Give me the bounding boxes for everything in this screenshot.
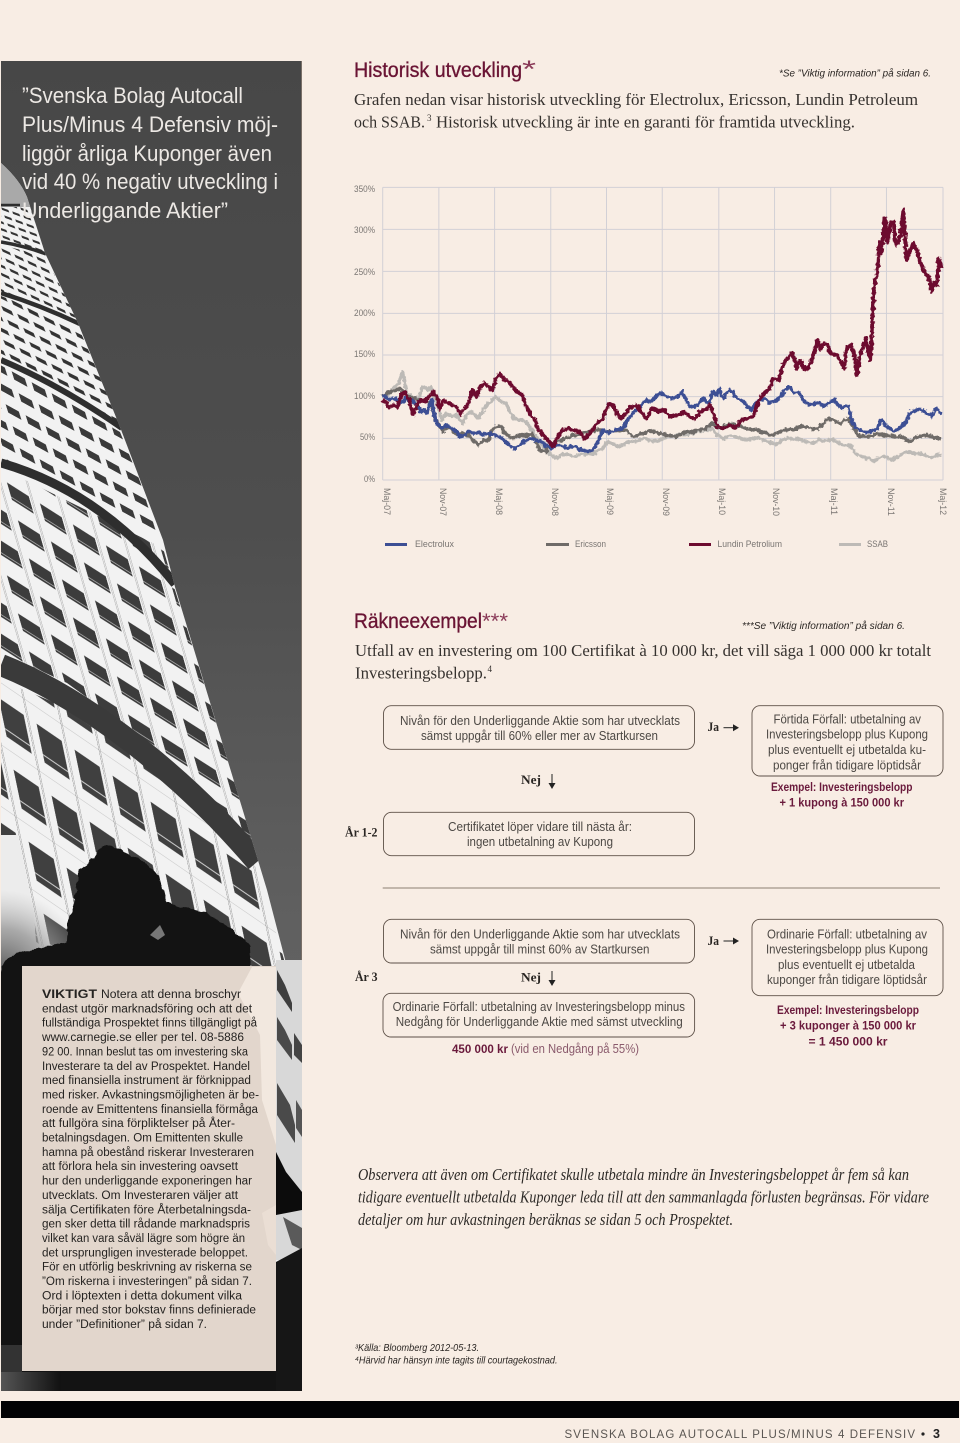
intro text: Räkneexempel: 4: [488, 664, 492, 674]
intro text: Historisk utveckling: 3: [427, 113, 432, 123]
box: ordinary maturity: plus eventuellt ej utbetalda: [778, 958, 915, 972]
notice text: Notera att denna broschyr: [101, 989, 241, 1001]
flow: year 3: [355, 919, 943, 1056]
quote in panel: [22, 83, 278, 223]
quote in panel: Plus/Minus 4 Defensiv möj-: [22, 112, 278, 137]
quote in panel: Underliggande Aktier”: [22, 198, 228, 223]
panel: VIKTIGT notice: [22, 966, 276, 1371]
x axis labels: Maj-08: [493, 488, 504, 515]
box: early maturity: ponger från tidigare löptidsår: [773, 758, 921, 772]
example: three coupons: Exempel: Investeringsbelopp: [777, 1003, 919, 1017]
italic remark: detaljer om hur avkastningen beräknas se sidan 5 och Prospektet.: [358, 1210, 733, 1229]
series: SSAB: [383, 372, 942, 462]
box: ordinary maturity minus decline: Nedgång för Underliggande Aktie med sämst utveckling: [396, 1015, 683, 1029]
photo: silhouette of person: [1, 845, 250, 1000]
box: ordinary maturity minus decline: Ordinarie Förfall: utbetalning av Investeringsbelopp minus: [393, 1000, 685, 1014]
notice text: www.carnegie.se eller per tel. 08-5886: [41, 1032, 244, 1044]
x axis labels: Nov-08: [549, 488, 560, 516]
intro text: Räkneexempel: [355, 641, 931, 682]
box: early maturity: plus eventuellt ej utbetalda ku-: [768, 743, 926, 757]
arrow: Nej: Nej: [521, 773, 541, 787]
notice text: börjar med stor bokstav finns definierade: [42, 1305, 256, 1317]
quote in panel: vid 40 % negativ utveckling i: [22, 169, 278, 194]
notice text: betalningsdagen. Om Emittenten skulle: [42, 1132, 243, 1144]
label: År 1-2: År 1-2: [345, 826, 378, 840]
intro text: Historisk utveckling: Grafen nedan visar historisk utveckling för Electrolux, Ericsson, Lundin Petroleum: [354, 90, 918, 109]
intro text: Historisk utveckling: och SSAB.: [354, 112, 425, 132]
example: loss amount: (vid en Nedgång på 55%): [511, 1042, 639, 1056]
chart legend: Lundin Petrolium: [718, 539, 782, 550]
box: ordinary maturity: Investeringsbelopp plus Kupong: [766, 942, 928, 956]
box: ordinary maturity: [752, 919, 943, 996]
panel: building photo: [0, 61, 302, 1391]
y axis labels: 150%: [354, 349, 375, 360]
series: Lundin Petrolium: [383, 209, 942, 447]
notice text: att förlora hela sin investering oavsett: [42, 1161, 239, 1173]
arrow: Ja: [708, 934, 739, 948]
box: level condition year 3: sämst uppgår till minst 60% av Startkursen: [430, 942, 650, 956]
note: see page 6: ***Se ”Viktig information” på sidan 6.: [742, 620, 905, 632]
x axis labels: Nov-07: [437, 488, 448, 516]
notice text: med finansiella instrument är förknippad: [42, 1075, 251, 1087]
notice text: ”Om riskerna i investeringen” på sidan 7.: [42, 1276, 252, 1288]
chart legend: Ericsson: [575, 539, 606, 550]
notice text: det ursprungligen investerade beloppet.: [42, 1247, 248, 1259]
heading: Historisk utveckling: *: [522, 56, 536, 83]
heading: Historisk utveckling: Historisk utveckling: [354, 59, 522, 82]
box: level condition year 3: Nivån för den Underliggande Aktie som har utvecklats: [400, 927, 680, 941]
y axis labels: 50%: [360, 432, 375, 443]
notice text: under ”Definitioner” på sidan 7.: [42, 1319, 207, 1331]
heading: Räkneexempel: ***: [482, 610, 508, 633]
note: see page 6: *Se ”Viktig information” på sidan 6.: [779, 68, 931, 80]
example: one coupon: Exempel: Investeringsbelopp: [771, 780, 912, 794]
example: one coupon: [771, 780, 912, 810]
box: level condition: [384, 706, 694, 749]
label: År 3: År 3: [355, 970, 378, 984]
notice text: endast utgör marknadsföring och att det: [42, 1003, 253, 1015]
footer text: SVENSKA BOLAG AUTOCALL PLUS/MINUS 4 DEFENSIV: [564, 1429, 915, 1441]
arrow: Nej: [521, 773, 556, 789]
footnotes: ⁴Härvid har hänsyn inte tagits till courtagekostnad.: [355, 1356, 558, 1366]
notice text: fullständiga Prospektet finns tillgängligt på: [42, 1018, 258, 1030]
x axis labels: Maj-09: [604, 488, 615, 515]
x axis labels: Maj-07: [381, 488, 392, 515]
box: ordinary maturity minus decline: [383, 993, 695, 1037]
y axis labels: 200%: [354, 308, 375, 319]
notice text: med risker. Avkastningsmöjligheten är be-: [42, 1090, 259, 1102]
chart legend: Electrolux: [415, 539, 454, 550]
y axis labels: [354, 184, 375, 485]
arrow: Nej: [521, 971, 556, 986]
italic remark: [358, 1165, 929, 1229]
example: loss amount: 450 000 kr: [452, 1042, 508, 1056]
arrow: Ja: Ja: [708, 720, 720, 734]
notice text: att fullgöra sina förpliktelser på Åter-: [42, 1117, 235, 1130]
example: loss amount: [452, 1042, 639, 1056]
y axis labels: 250%: [354, 267, 375, 278]
arrow: Nej: Nej: [521, 971, 541, 985]
notice text: [41, 989, 259, 1331]
example: three coupons: + 3 kuponger à 150 000 kr: [780, 1019, 916, 1033]
series: Ericsson: [383, 388, 941, 452]
example: three coupons: = 1 450 000 kr: [808, 1035, 888, 1049]
box: certificate continues: Certifikatet löper vidare till nästa år:: [448, 820, 632, 834]
notice text: För en utförlig beskrivning av riskerna se: [42, 1262, 252, 1274]
notice text: VIKTIGT: [42, 989, 97, 1001]
flow: year 1-2: [345, 706, 943, 856]
x axis labels: Maj-12: [937, 488, 948, 515]
intro text: Räkneexempel: Investeringsbelopp.: [355, 664, 487, 682]
box: early maturity: Förtida Förfall: utbetalning av: [774, 712, 922, 726]
plot lines: [383, 209, 942, 462]
arrow: Ja: [708, 720, 739, 734]
y axis labels: 0%: [364, 474, 375, 485]
box: certificate continues: [384, 812, 694, 856]
intro text: Historisk utveckling: Historisk utveckling är inte en garanti för framtida utveckling.: [436, 112, 855, 132]
chart legend: SSAB: [867, 539, 888, 550]
quote in panel: ”Svenska Bolag Autocall: [22, 83, 243, 108]
series: Electrolux: [383, 387, 942, 451]
notice text: vilket kan vara såväl lägre som högre än: [42, 1233, 245, 1245]
x axis labels: Nov-11: [885, 488, 896, 516]
arrow: Ja: Ja: [708, 934, 720, 948]
y axis labels: 300%: [354, 225, 375, 236]
chart legend: [385, 539, 888, 550]
box: ordinary maturity: kuponger från tidigare löptidsår: [767, 973, 927, 987]
box: ordinary maturity: Ordinarie Förfall: utbetalning av: [767, 927, 928, 941]
intro text: Räkneexempel: Utfall av en investering om 100 Certifikat à 10 000 kr, det vill säga 1 000 000 kr totalt: [355, 641, 931, 660]
notice text: hur den underliggande exponeringen har: [42, 1176, 252, 1188]
notice text: roende av Emittentens finansiella förmåga: [42, 1104, 259, 1116]
notice text: Ord i löptexten i detta dokument vilka: [42, 1290, 243, 1302]
notice text: Investerare ta del av Prospektet. Handel: [42, 1061, 250, 1073]
photo: tower facade: [1, 163, 286, 1262]
footer text: 3: [933, 1427, 940, 1441]
line chart: historical development: [354, 184, 948, 516]
x axis labels: Maj-10: [716, 488, 727, 515]
box: level condition: Nivån för den Underliggande Aktie som har utvecklats: [400, 714, 680, 728]
heading: Räkneexempel: Räkneexempel: [354, 610, 482, 633]
notice text: gen sker detta till rådande marknadspris: [42, 1219, 250, 1231]
x axis labels: Nov-10: [770, 488, 781, 516]
example: one coupon: + 1 kupong à 150 000 kr: [780, 796, 904, 810]
box: level condition: sämst uppgår till 60% eller mer av Startkursen: [421, 729, 658, 743]
example: three coupons: [777, 1003, 919, 1049]
box: early maturity: Investeringsbelopp plus Kupong: [766, 728, 928, 742]
quote in panel: liggör årliga Kuponger även: [22, 141, 272, 166]
box: level condition year 3: [384, 919, 694, 963]
box: certificate continues: ingen utbetalning av Kupong: [467, 835, 613, 849]
y axis labels: 100%: [354, 391, 375, 402]
notice text: utvecklats. Om Investeraren väljer att: [42, 1190, 239, 1202]
x axis labels: [381, 488, 948, 516]
notice text: hamna på obestånd riskerar Investeraren: [42, 1147, 254, 1159]
footnotes: ³Källa: Bloomberg 2012-05-13.: [355, 1343, 479, 1354]
photo: right strip of windows beside the text box: [276, 960, 302, 1391]
intro text: Historisk utveckling: [354, 90, 918, 132]
y axis labels: 350%: [354, 184, 375, 195]
notice text: 92 00. Innan beslut tas om investering ska: [42, 1046, 249, 1058]
x axis labels: Maj-11: [828, 488, 839, 515]
notice text: sälja Certifikaten före Återbetalningsda-: [42, 1203, 251, 1216]
box: early maturity: [752, 706, 943, 776]
black footer bar: [1, 1401, 959, 1418]
x axis labels: Nov-09: [660, 488, 671, 516]
footnotes: [355, 1343, 558, 1366]
